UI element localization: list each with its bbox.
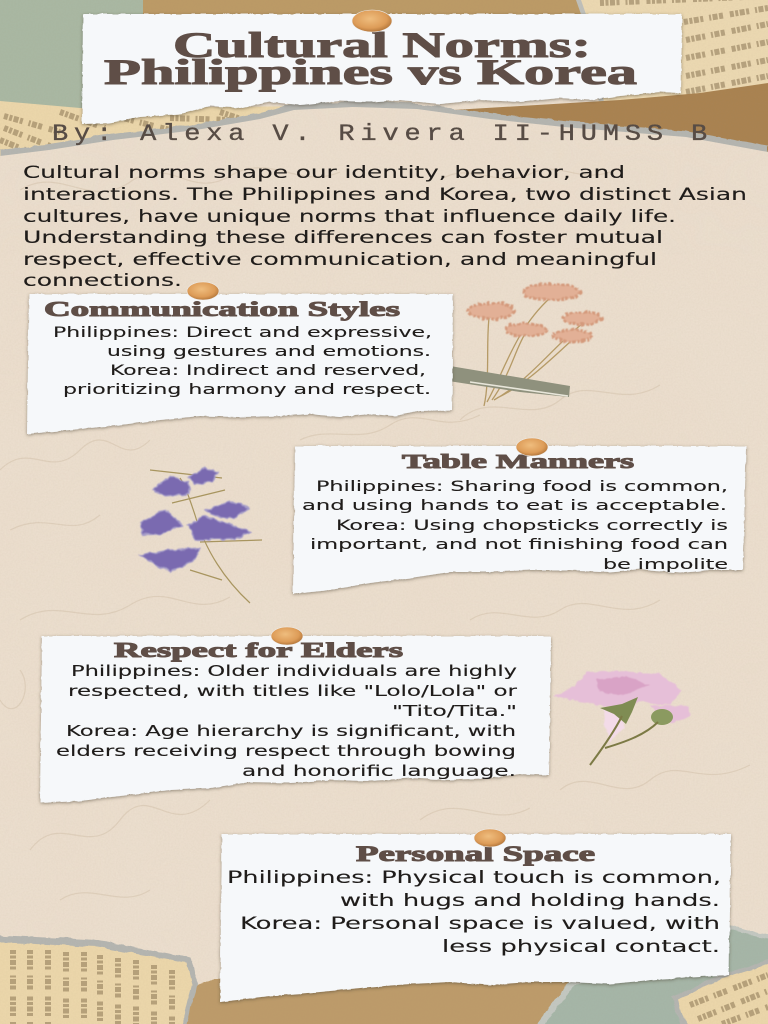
- torn white sheet: [27, 294, 453, 434]
- heading: Table Manners: [402, 451, 634, 473]
- body text: [53, 325, 432, 398]
- byline: By: Alexa V. Rivera II-HUMSS B: [52, 121, 713, 147]
- scrap: newspaper left: [0, 101, 330, 170]
- body text: using gestures and emotions.: [107, 344, 431, 360]
- icon: pin: [352, 10, 392, 32]
- scrap: green paper bottom: [532, 925, 768, 1024]
- body text: Korea: Age hierarchy is significant, with: [66, 723, 516, 740]
- panel: table manners: [293, 438, 746, 594]
- body text: with hugs and holding hands.: [340, 891, 720, 911]
- tape strip: [429, 365, 570, 397]
- intro paragraph: connections.: [23, 271, 182, 290]
- beige paper body: [0, 107, 768, 900]
- body text: and honorific language.: [242, 763, 516, 780]
- title panel: [82, 10, 682, 124]
- intro paragraph: cultures, have unique norms that influence daily life.: [23, 207, 676, 226]
- panel: respect for elders: [40, 627, 551, 803]
- top paper scraps: [0, 0, 768, 170]
- body text: [302, 479, 728, 573]
- body text: important, and not finishing food can: [310, 537, 728, 553]
- scrap: tan paper: [143, 0, 588, 40]
- scrap: newspaper bottom right: [672, 958, 768, 1024]
- icon: pin: [271, 627, 303, 645]
- title text: Philippines vs Korea: [104, 52, 637, 92]
- panel: communication styles: [27, 282, 453, 434]
- body text: Philippines: Physical touch is common,: [227, 868, 721, 888]
- title text: [104, 25, 637, 92]
- intro paragraph: Cultural norms shape our identity, behavior, and: [23, 163, 625, 182]
- body text: Korea: Indirect and reserved,: [110, 363, 426, 379]
- illustration: pink rose: [554, 671, 691, 765]
- heading: Personal Space: [356, 841, 595, 866]
- intro paragraph: Understanding these differences can foster mutual: [23, 228, 663, 247]
- heading: Communication Styles: [44, 297, 400, 321]
- body text: [227, 868, 721, 957]
- body text: Korea: Personal space is valued, with: [240, 914, 720, 934]
- body text: Philippines: Older individuals are highly: [71, 663, 517, 680]
- body text: less physical contact.: [442, 937, 720, 957]
- illustration: pressed purple flowers: [140, 468, 262, 603]
- body text: be impolite: [603, 557, 728, 573]
- title text: Cultural Norms:: [173, 25, 591, 65]
- intro paragraph: respect, effective communication, and meaningful: [23, 250, 657, 269]
- intro paragraph: interactions. The Philippines and Korea, two distinct Asian: [23, 185, 747, 204]
- body text: respected, with titles like "Lolo/Lola" or: [68, 683, 518, 700]
- scrap: tan paper bottom: [185, 978, 575, 1024]
- bottom paper scraps: [0, 925, 768, 1024]
- scrap: newspaper bottom left: [0, 935, 198, 1024]
- icon: pin: [187, 282, 219, 300]
- intro paragraph: [23, 163, 747, 290]
- scrap: brown paper right: [420, 83, 768, 160]
- illustration: pressed orange flowers: [429, 284, 601, 406]
- body text: "Tito/Tita.": [392, 703, 517, 720]
- scrap: green paper: [0, 0, 150, 115]
- heading: Respect for Elders: [114, 638, 403, 662]
- body text: and using hands to eat is acceptable.: [302, 498, 727, 514]
- icon: pin: [474, 829, 506, 847]
- body text: Philippines: Sharing food is common,: [316, 479, 728, 495]
- body text: elders receiving respect through bowing: [56, 743, 516, 760]
- body text: Korea: Using chopsticks correctly is: [336, 518, 728, 534]
- torn white sheet: [293, 446, 746, 594]
- beige paper with grey torn rim: [0, 100, 768, 900]
- body text: Philippines: Direct and expressive,: [53, 325, 432, 341]
- icon: pin: [516, 438, 548, 456]
- torn white title sheet: [82, 14, 682, 124]
- torn white sheet: [220, 834, 731, 1002]
- panel: personal space: [220, 829, 731, 1002]
- scrap: newspaper top right: [576, 0, 768, 110]
- body text: prioritizing harmony and respect.: [63, 382, 431, 398]
- body text: [56, 663, 518, 780]
- torn white sheet: [40, 636, 551, 803]
